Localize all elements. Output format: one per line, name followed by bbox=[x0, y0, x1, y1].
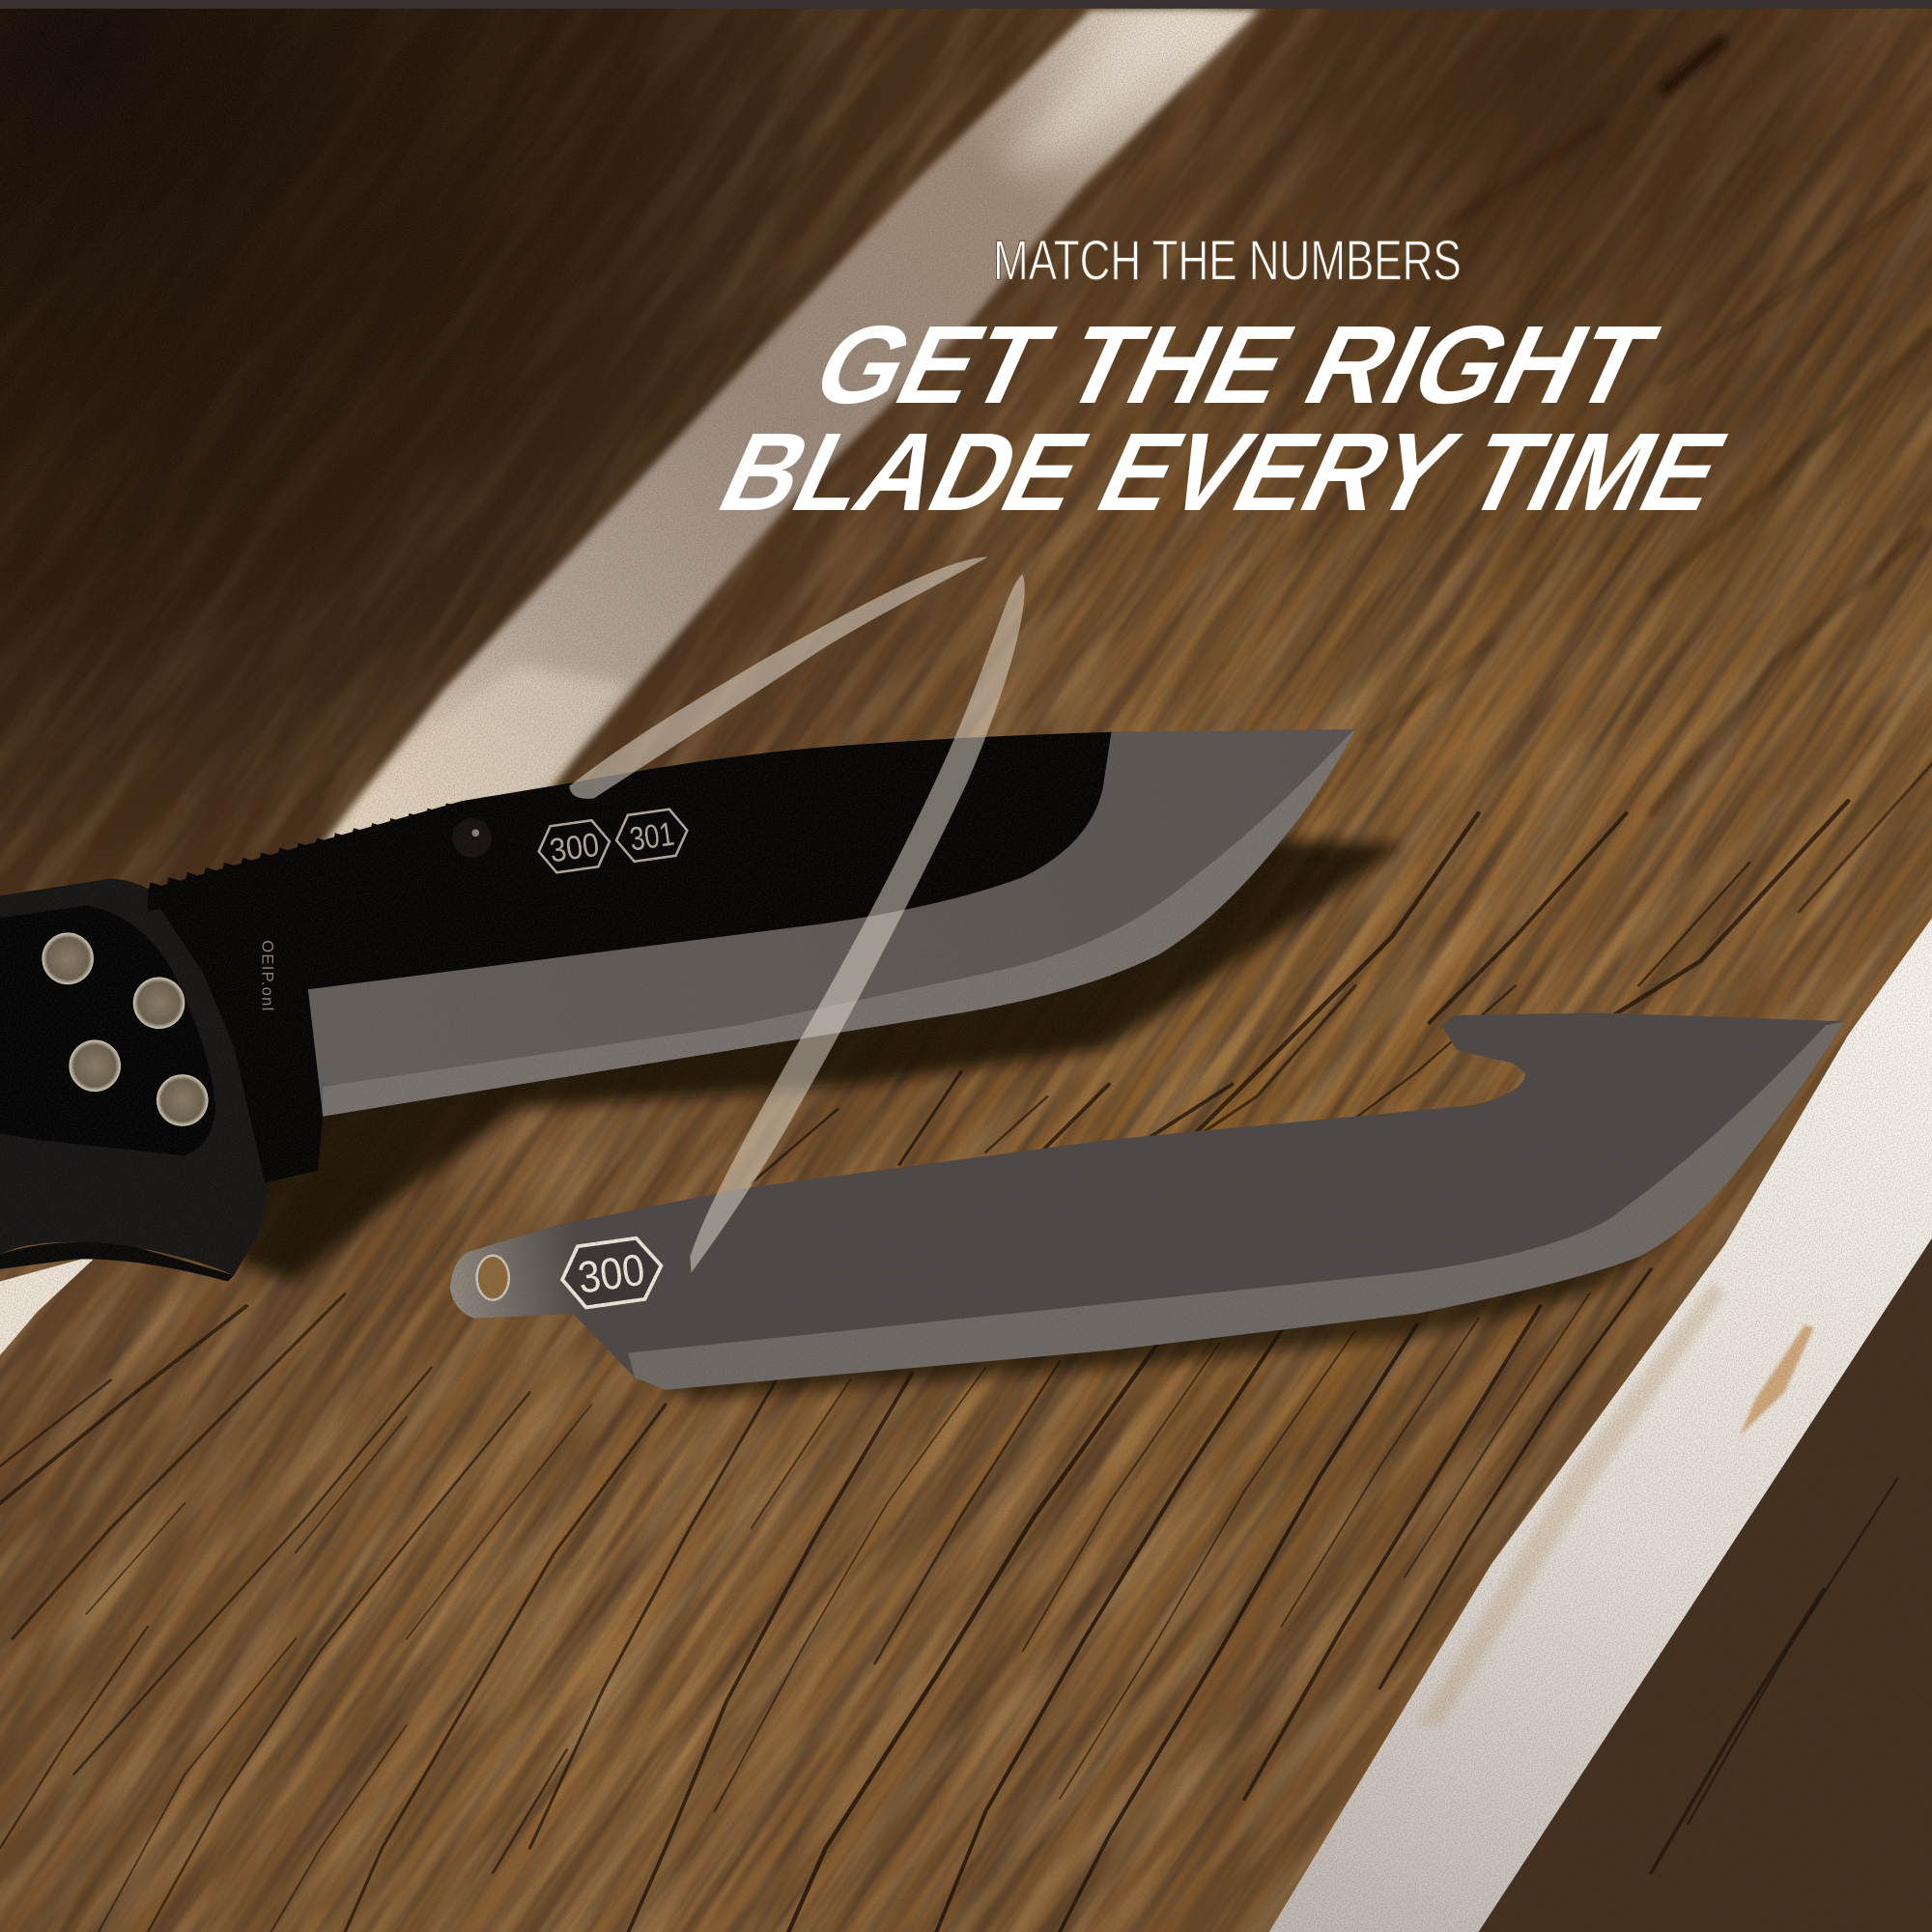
blade black coated portion bbox=[148, 732, 1115, 1182]
arrow stroke to blade badge bbox=[690, 574, 1025, 1273]
pivot screw bbox=[452, 818, 492, 858]
knife bbox=[0, 729, 1355, 1282]
badge 301 on knife bbox=[613, 808, 691, 864]
tang bbox=[450, 1220, 604, 1319]
spare gut-hook blade bbox=[450, 1012, 1844, 1390]
white painted strip upper bbox=[314, 10, 1260, 856]
blade gray edge portion bbox=[308, 729, 1355, 1117]
badge 300 on blade: 300 bbox=[575, 1244, 647, 1303]
badge 300 on knife: 300 bbox=[548, 827, 602, 869]
badge 300 on blade bbox=[558, 1236, 666, 1310]
knife handle bbox=[0, 878, 269, 1282]
white strip fragment left bbox=[0, 1254, 99, 1355]
headline line 1: GET THE RIGHT bbox=[795, 302, 1674, 427]
white painted strip lower right bbox=[1269, 918, 1932, 1932]
arrow stroke to knife badge bbox=[569, 557, 988, 799]
subtitle: MATCH THE NUMBERS bbox=[993, 230, 1462, 293]
handle screws bbox=[42, 933, 209, 1126]
tang hole bbox=[477, 1256, 509, 1300]
shadow under spare blade bbox=[666, 1233, 1676, 1399]
badge 301 on knife: 301 bbox=[628, 816, 676, 859]
wood cracks bbox=[0, 764, 1932, 1932]
blade bevel highlight bbox=[323, 729, 1355, 1117]
top edge bar bbox=[0, 0, 1932, 9]
blurred cracks in upper wood bbox=[1233, 42, 1932, 813]
spine serrations bbox=[148, 804, 462, 912]
headline line 2: BLADE EVERY TIME bbox=[701, 410, 1745, 534]
engraved brand text: OEIP.onl bbox=[259, 940, 277, 1012]
shadow under knife bbox=[222, 838, 1405, 1282]
blade bevel bbox=[629, 1021, 1844, 1390]
headline bbox=[701, 302, 1745, 534]
badge 300 on knife bbox=[535, 818, 612, 874]
